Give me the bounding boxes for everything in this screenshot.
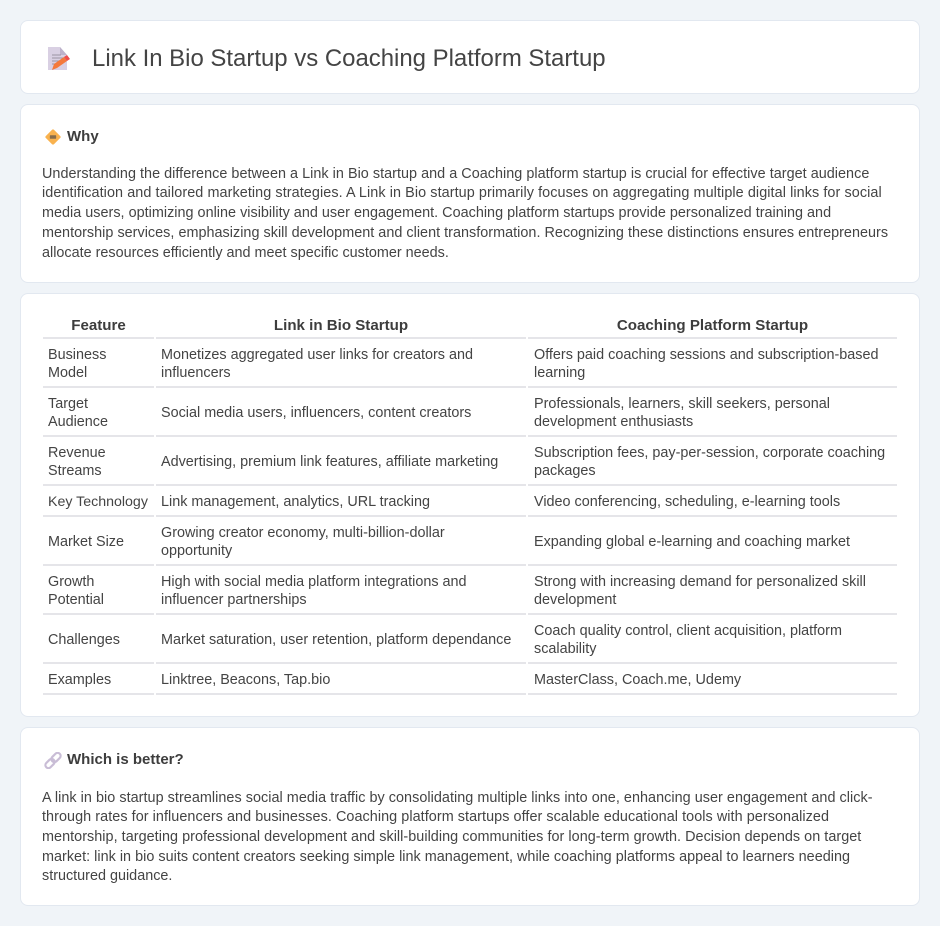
panel: which is better: through rates for influencers and businesses. Coaching platform startups offer scalable educational tools with personalized [42,809,829,825]
row: key technology: Key Technology [48,494,148,510]
row: business model [48,347,879,381]
panel: why: allocate resources efficiently and meet specific customer needs. [42,245,449,261]
row: challenges: Market saturation, user retention, platform dependance [161,632,511,648]
row: target audience: Social media users, influencers, content creators [161,405,471,421]
row: examples: Linktree, Beacons, Tap.bio [161,672,330,688]
row: business model: Business [48,347,106,363]
row: key technology [48,494,840,510]
panel: which is better: structured guidance. [42,868,172,884]
row: market size: Expanding global e-learning and coaching market [534,534,850,550]
row: challenges: Coach quality control, client acquisition, platform [534,623,842,639]
table header row: Coaching Platform Startup [617,317,808,334]
row: revenue streams: packages [534,463,596,479]
table header row [71,317,808,334]
row: growth potential: High with social media platform integrations and [161,574,467,590]
icon: link [44,752,62,769]
row: business model: Monetizes aggregated user links for creators and [161,347,473,363]
text block: why paragraph [42,166,888,261]
row: growth potential: Strong with increasing demand for personalized skill [534,574,866,590]
row: challenges [48,623,842,657]
panel: comparison table [20,293,920,717]
row: revenue streams: Revenue [48,445,106,461]
row: business model: learning [534,365,585,381]
row: growth potential: Potential [48,592,104,608]
row: growth potential: Growth [48,574,94,590]
text block: which is better paragraph [42,790,873,884]
row: business model: influencers [161,365,231,381]
panel: why: media users, optimizing online visibility and user engagement. Coaching platform startups provide personalized training and [42,205,831,221]
panel: which is better [20,727,920,906]
table header row: Feature [71,317,126,334]
table header row: Link in Bio Startup [274,317,408,334]
panel: which is better: A link in bio startup streamlines social media traffic by consolidating multiple links into one, enhancing user engagement and click- [42,790,873,806]
panel: which is better: market: link in bio suits content creators seeking simple link management, while coaching platforms appeal to learners needing [42,849,850,865]
row: revenue streams [48,445,885,479]
title: Link In Bio Startup vs Coaching Platform Startup [92,45,606,72]
row: examples [48,672,741,688]
row: key technology: Link management, analytics, URL tracking [161,494,430,510]
row: business model: Model [48,365,87,381]
panel: why: Understanding the difference between a Link in Bio startup and a Coaching platform startup is crucial for effective target audience [42,166,869,182]
heading: which is better: Which is better? [67,751,184,768]
row: business model: Offers paid coaching sessions and subscription-based [534,347,879,363]
row: revenue streams: Streams [48,463,102,479]
row: target audience: Target [48,396,88,412]
panel: which is better: mentorship, targeting professional development and skill-building communities for long-term growth. Decision depends on target [42,829,861,845]
row: challenges: scalability [534,641,596,657]
row: key technology: Video conferencing, scheduling, e-learning tools [534,494,840,510]
icon: diamond sign [45,129,61,145]
icon: memo with pencil [48,47,70,70]
row: market size: Growing creator economy, multi-billion-dollar [161,525,445,541]
comparison table [43,317,897,695]
panel: why: identification and tailored marketing strategies. A Link in Bio startup primarily focuses on aggregating multiple digital links for social [42,185,882,201]
row: market size: Market Size [48,534,124,550]
panel: why: mentorship services, emphasizing skill development and client transformation. Recognizing these distinctions ensures entrepreneurs [42,225,888,241]
row: growth potential: influencer partnerships [161,592,307,608]
row: growth potential: development [534,592,616,608]
row: examples: Examples [48,672,111,688]
row: revenue streams: Advertising, premium link features, affiliate marketing [161,454,498,470]
row: target audience [48,396,830,430]
heading: why: Why [67,128,99,145]
row: target audience: Professionals, learners, skill seekers, personal [534,396,830,412]
panel: title header [20,20,920,94]
row: target audience: development enthusiasts [534,414,693,430]
row: growth potential [48,574,866,608]
row: revenue streams: Subscription fees, pay-per-session, corporate coaching [534,445,885,461]
row: market size: opportunity [161,543,232,559]
row: target audience: Audience [48,414,108,430]
row: challenges: Challenges [48,632,120,648]
panel: why [20,104,920,283]
row: examples: MasterClass, Coach.me, Udemy [534,672,741,688]
row: market size [48,525,850,559]
